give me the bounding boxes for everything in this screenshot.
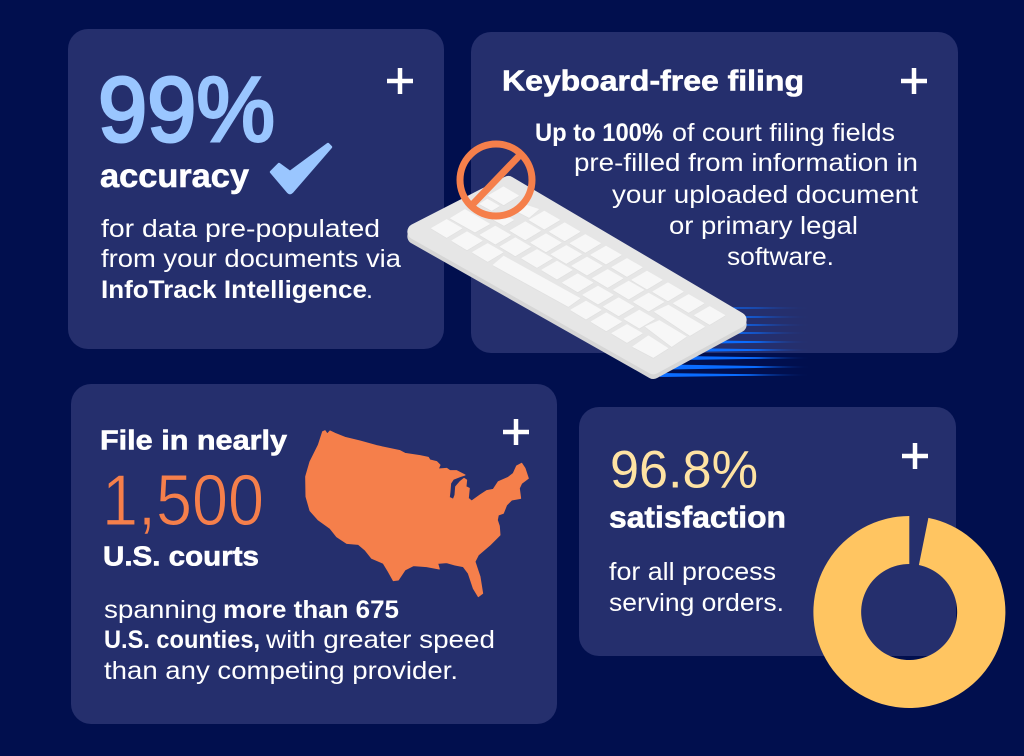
keyboard top [415, 184, 739, 366]
text: courts description: U.S. counties, [104, 626, 260, 654]
text: courts description: with greater speed [265, 626, 495, 654]
heading: accuracy: accuracy [100, 157, 250, 194]
speed lines [660, 307, 811, 377]
text: filing description [535, 119, 918, 271]
text: filing description: of court filing fields [672, 119, 895, 147]
panel: 96.8% satisfaction [579, 407, 1005, 708]
text: accuracy description [101, 215, 401, 304]
heading: satisfaction: satisfaction [609, 500, 786, 534]
donut chart: 96.8% [813, 516, 1005, 708]
text: courts description: than any competing provider. [104, 657, 458, 685]
text: accuracy description: InfoTrack Intelligence [101, 276, 367, 304]
heading: file in nearly: File in nearly [100, 424, 288, 456]
icon: plus [387, 68, 413, 94]
icon: keyboard [415, 184, 739, 371]
text: satisfaction description: serving orders. [609, 589, 784, 617]
icon: prohibition sign [460, 144, 532, 216]
keys [432, 187, 725, 357]
text: filing description: your uploaded document [612, 181, 918, 209]
stat: 99%: 99% [98, 59, 275, 161]
icon: plus [902, 443, 928, 469]
icon: map of the United States [306, 431, 528, 597]
text: filing description: or primary legal [669, 212, 858, 240]
text: accuracy description: from your documents via [101, 245, 401, 273]
stat: 1,500: 1,500 [102, 461, 264, 541]
text: courts description: more than 675 [223, 596, 399, 624]
text: satisfaction description [609, 558, 784, 617]
icon: plus [503, 419, 529, 445]
text: filing description: software. [727, 243, 834, 271]
icon: check mark [271, 144, 331, 193]
text: filing description: Up to 100% [535, 119, 663, 147]
text: courts description: spanning [104, 596, 217, 624]
stat: 96.8%: 96.8% [610, 440, 758, 500]
icon: plus [901, 68, 927, 94]
panel: 1,500 U.S. courts [71, 384, 557, 724]
text: satisfaction description: for all process [609, 558, 776, 586]
text: filing description: pre-filled from information in [574, 149, 918, 177]
keyboard side [415, 189, 739, 371]
panel: keyboard-free filing [471, 32, 958, 353]
text: courts description [104, 596, 495, 685]
panel: 99% accuracy [68, 29, 444, 349]
heading: U.S. courts: U.S. courts [103, 540, 259, 572]
heading: keyboard-free filing: Keyboard-free filing [502, 66, 804, 98]
text: accuracy description: for data pre-populated [101, 215, 380, 243]
text: accuracy description: . [366, 276, 373, 304]
